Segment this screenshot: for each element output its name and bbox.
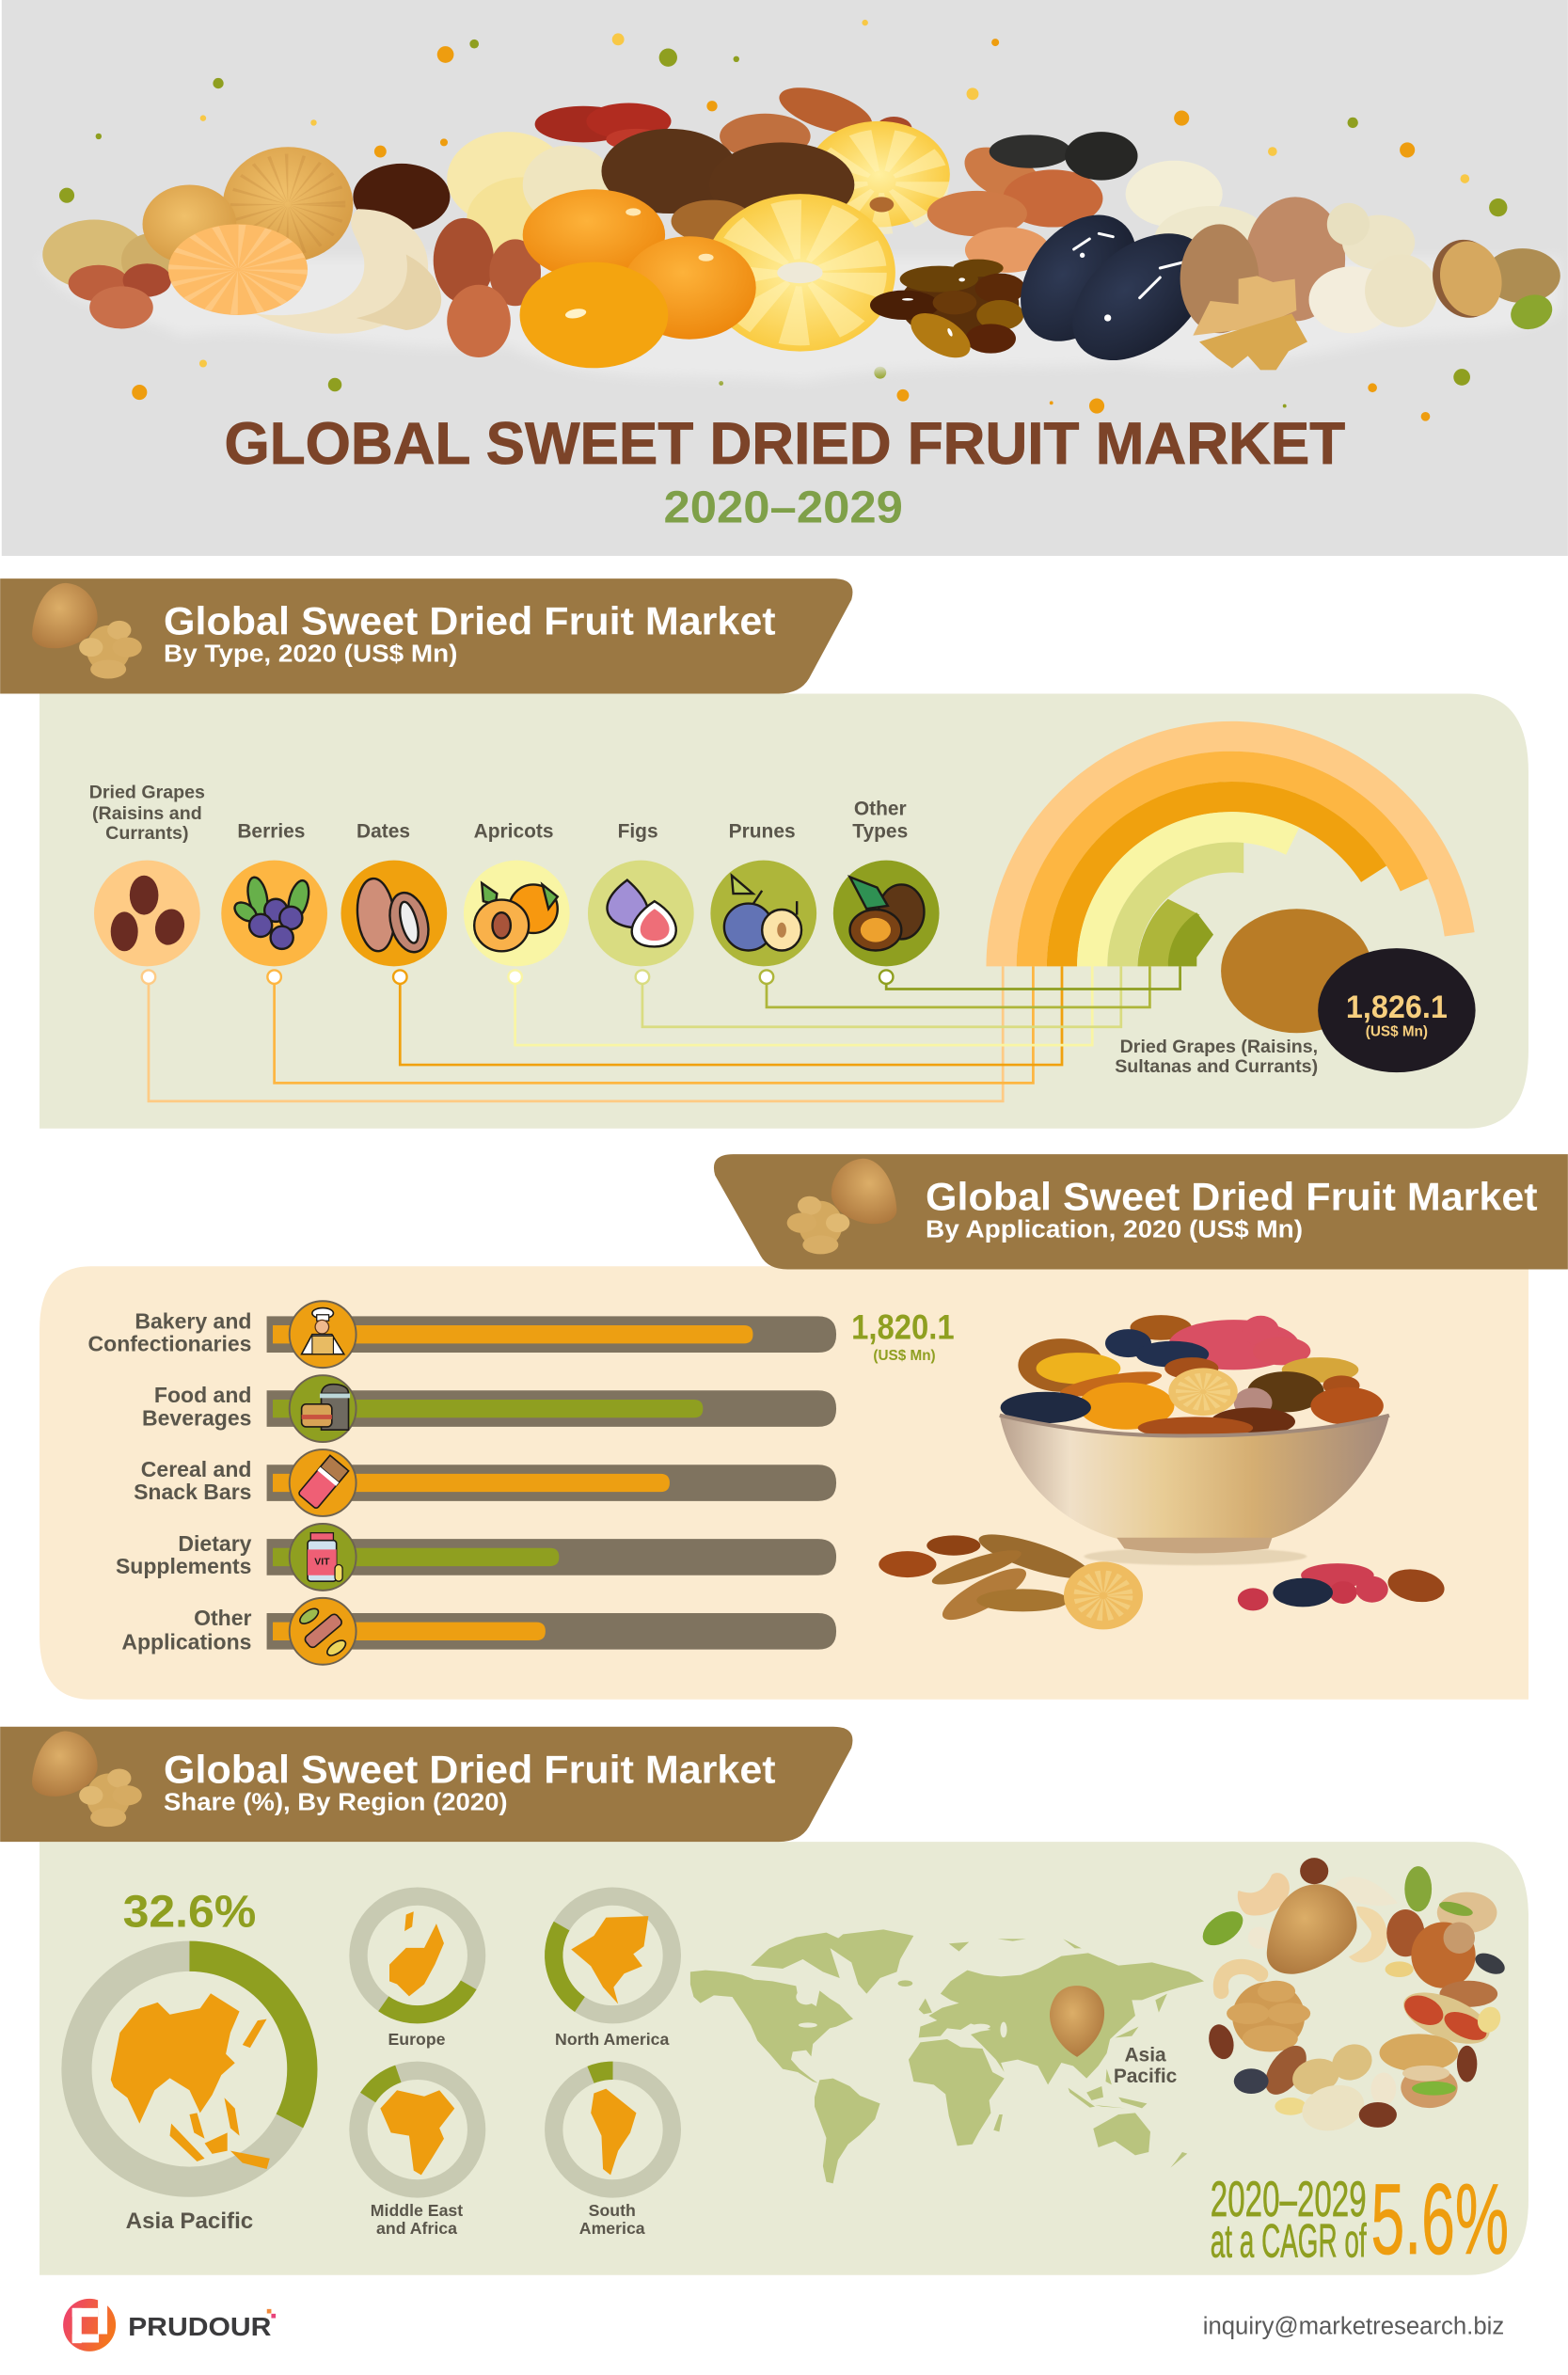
prunes (997, 193, 1233, 386)
callout: dried grapes value: Dried Grapes (Raisins, (1120, 1037, 1318, 1057)
icon: apricots (464, 861, 570, 984)
donut: north america (554, 1896, 672, 2049)
title years: 2020–2029 (663, 483, 903, 533)
icon: dates (341, 861, 447, 984)
bar chart: by application (88, 1301, 836, 1665)
panel: hero header (2, 0, 1568, 556)
icon: prunes (710, 861, 816, 984)
panel: by application (40, 1266, 1528, 1700)
banner subtitle: By Application, 2020 (US$ Mn) (926, 1217, 1303, 1243)
icon: almond and walnut (787, 1159, 896, 1254)
callout: top application value: 1,820.1 (851, 1307, 955, 1347)
icon: berries (221, 861, 327, 984)
illustration: nuts ring (1196, 1858, 1508, 2137)
heading banner: by application (714, 1154, 1568, 1269)
map marker: asia pacific: Pacific (1114, 2066, 1178, 2087)
map marker: asia pacific (1050, 1986, 1178, 2087)
category labels: by type: Figs (618, 821, 658, 843)
bar row: food and beverages: Food and (154, 1383, 251, 1407)
callout: top application value (851, 1307, 955, 1364)
category labels: by type: Apricots (474, 821, 553, 843)
donut: south america (554, 2070, 672, 2238)
bar row: other applications (121, 1598, 836, 1665)
bar row: bakery and confectionaries: Confectionaries (88, 1331, 251, 1355)
bar row: dietary supplements: VIT (314, 1557, 330, 1567)
callout: dried grapes value (1115, 909, 1476, 1077)
donut: south america: South (589, 2201, 636, 2220)
donut: asia pacific: Asia Pacific (126, 2209, 253, 2234)
donut: europe (358, 1896, 477, 2049)
banner title: Global Sweet Dried Fruit Market (164, 599, 776, 643)
callout: dried grapes value: (US$ Mn) (1366, 1023, 1428, 1039)
panel: by region (40, 1842, 1528, 2275)
icon: figs (588, 861, 694, 984)
donut: europe: Europe (388, 2030, 446, 2049)
category labels: by type: Dates (356, 821, 410, 843)
bar row: cereal and snack bars: Cereal and (141, 1457, 251, 1481)
world map (690, 1929, 1204, 2183)
category labels: by type: Other (854, 798, 907, 819)
heading banner: by type (0, 578, 852, 694)
callout: dried grapes value: 1,826.1 (1346, 990, 1448, 1025)
donut: middle east and africa (358, 2070, 477, 2238)
illustration: dried fruit left (879, 1526, 1143, 1629)
banner subtitle: By Type, 2020 (US$ Mn) (164, 641, 457, 668)
raisins cluster (870, 260, 1025, 367)
category labels: by type: Berries (237, 821, 305, 843)
icon: raisins (94, 861, 200, 984)
footer logo (63, 2299, 276, 2351)
footer email: inquiry@marketresearch.biz (1203, 2314, 1504, 2340)
bar row: bakery and confectionaries: Bakery and (135, 1308, 251, 1333)
donut: middle east and africa: Middle East (371, 2201, 463, 2220)
callout: dried grapes value: Sultanas and Currants) (1115, 1056, 1318, 1077)
bar row: food and beverages (142, 1375, 836, 1442)
icon: almond and walnut (32, 1731, 142, 1827)
map marker: asia pacific: Asia (1124, 2045, 1166, 2066)
banner subtitle: Share (%), By Region (2020) (164, 1789, 508, 1815)
icon: walnuts (833, 861, 940, 984)
callout: cagr (1211, 2163, 1509, 2275)
panel: by type (40, 694, 1528, 1129)
hero fruit pile shadow (38, 258, 1560, 382)
donut: asia pacific: 32.6% (123, 1886, 256, 1937)
callout: cagr: at a CAGR of (1211, 2214, 1367, 2267)
category labels: by type: Prunes (729, 821, 796, 843)
donut: middle east and africa: and Africa (376, 2219, 457, 2238)
category labels: by type: (Raisins and (92, 803, 202, 824)
hero background dots (59, 20, 1507, 421)
main title: GLOBAL SWEET DRIED FRUIT MARKET (224, 411, 1345, 477)
connector lines (149, 966, 1180, 1101)
banner title: Global Sweet Dried Fruit Market (926, 1175, 1538, 1219)
donut: asia pacific (76, 1886, 302, 2234)
category labels: by type (89, 783, 908, 844)
donut: north america: North America (555, 2030, 670, 2049)
illustration: fruit bowl (1000, 1315, 1389, 1565)
icon: almond and walnut (32, 583, 142, 679)
bar row: dietary supplements: Supplements (116, 1554, 251, 1578)
category labels: by type: Currants) (105, 823, 189, 844)
callout: top application value: (US$ Mn) (873, 1348, 936, 1364)
heading banner: by region (0, 1727, 852, 1842)
footer logo: PRUDOUR (128, 2312, 271, 2341)
callout: cagr: 2020–2029 (1211, 2172, 1367, 2227)
semi-circular chart: by type (986, 721, 1475, 966)
bar row: dietary supplements: Dietary (178, 1531, 252, 1556)
bar row: cereal and snack bars (134, 1449, 836, 1516)
banner title: Global Sweet Dried Fruit Market (164, 1747, 776, 1791)
category labels: by type: Dried Grapes (89, 783, 205, 803)
bar row: cereal and snack bars: Snack Bars (134, 1480, 251, 1504)
hero dried fruit pile (42, 78, 1560, 386)
bar row: other applications: Applications (121, 1630, 251, 1655)
bar row: other applications: Other (194, 1606, 252, 1630)
donut: south america: America (579, 2219, 645, 2238)
category labels: by type: Types (852, 821, 908, 843)
bar row: bakery and confectionaries (88, 1301, 836, 1368)
illustration: dried fruit right (1238, 1563, 1449, 1610)
bar row: food and beverages: Beverages (142, 1405, 251, 1430)
bar row: dietary supplements (116, 1524, 836, 1591)
walnut kernel (1193, 276, 1307, 370)
